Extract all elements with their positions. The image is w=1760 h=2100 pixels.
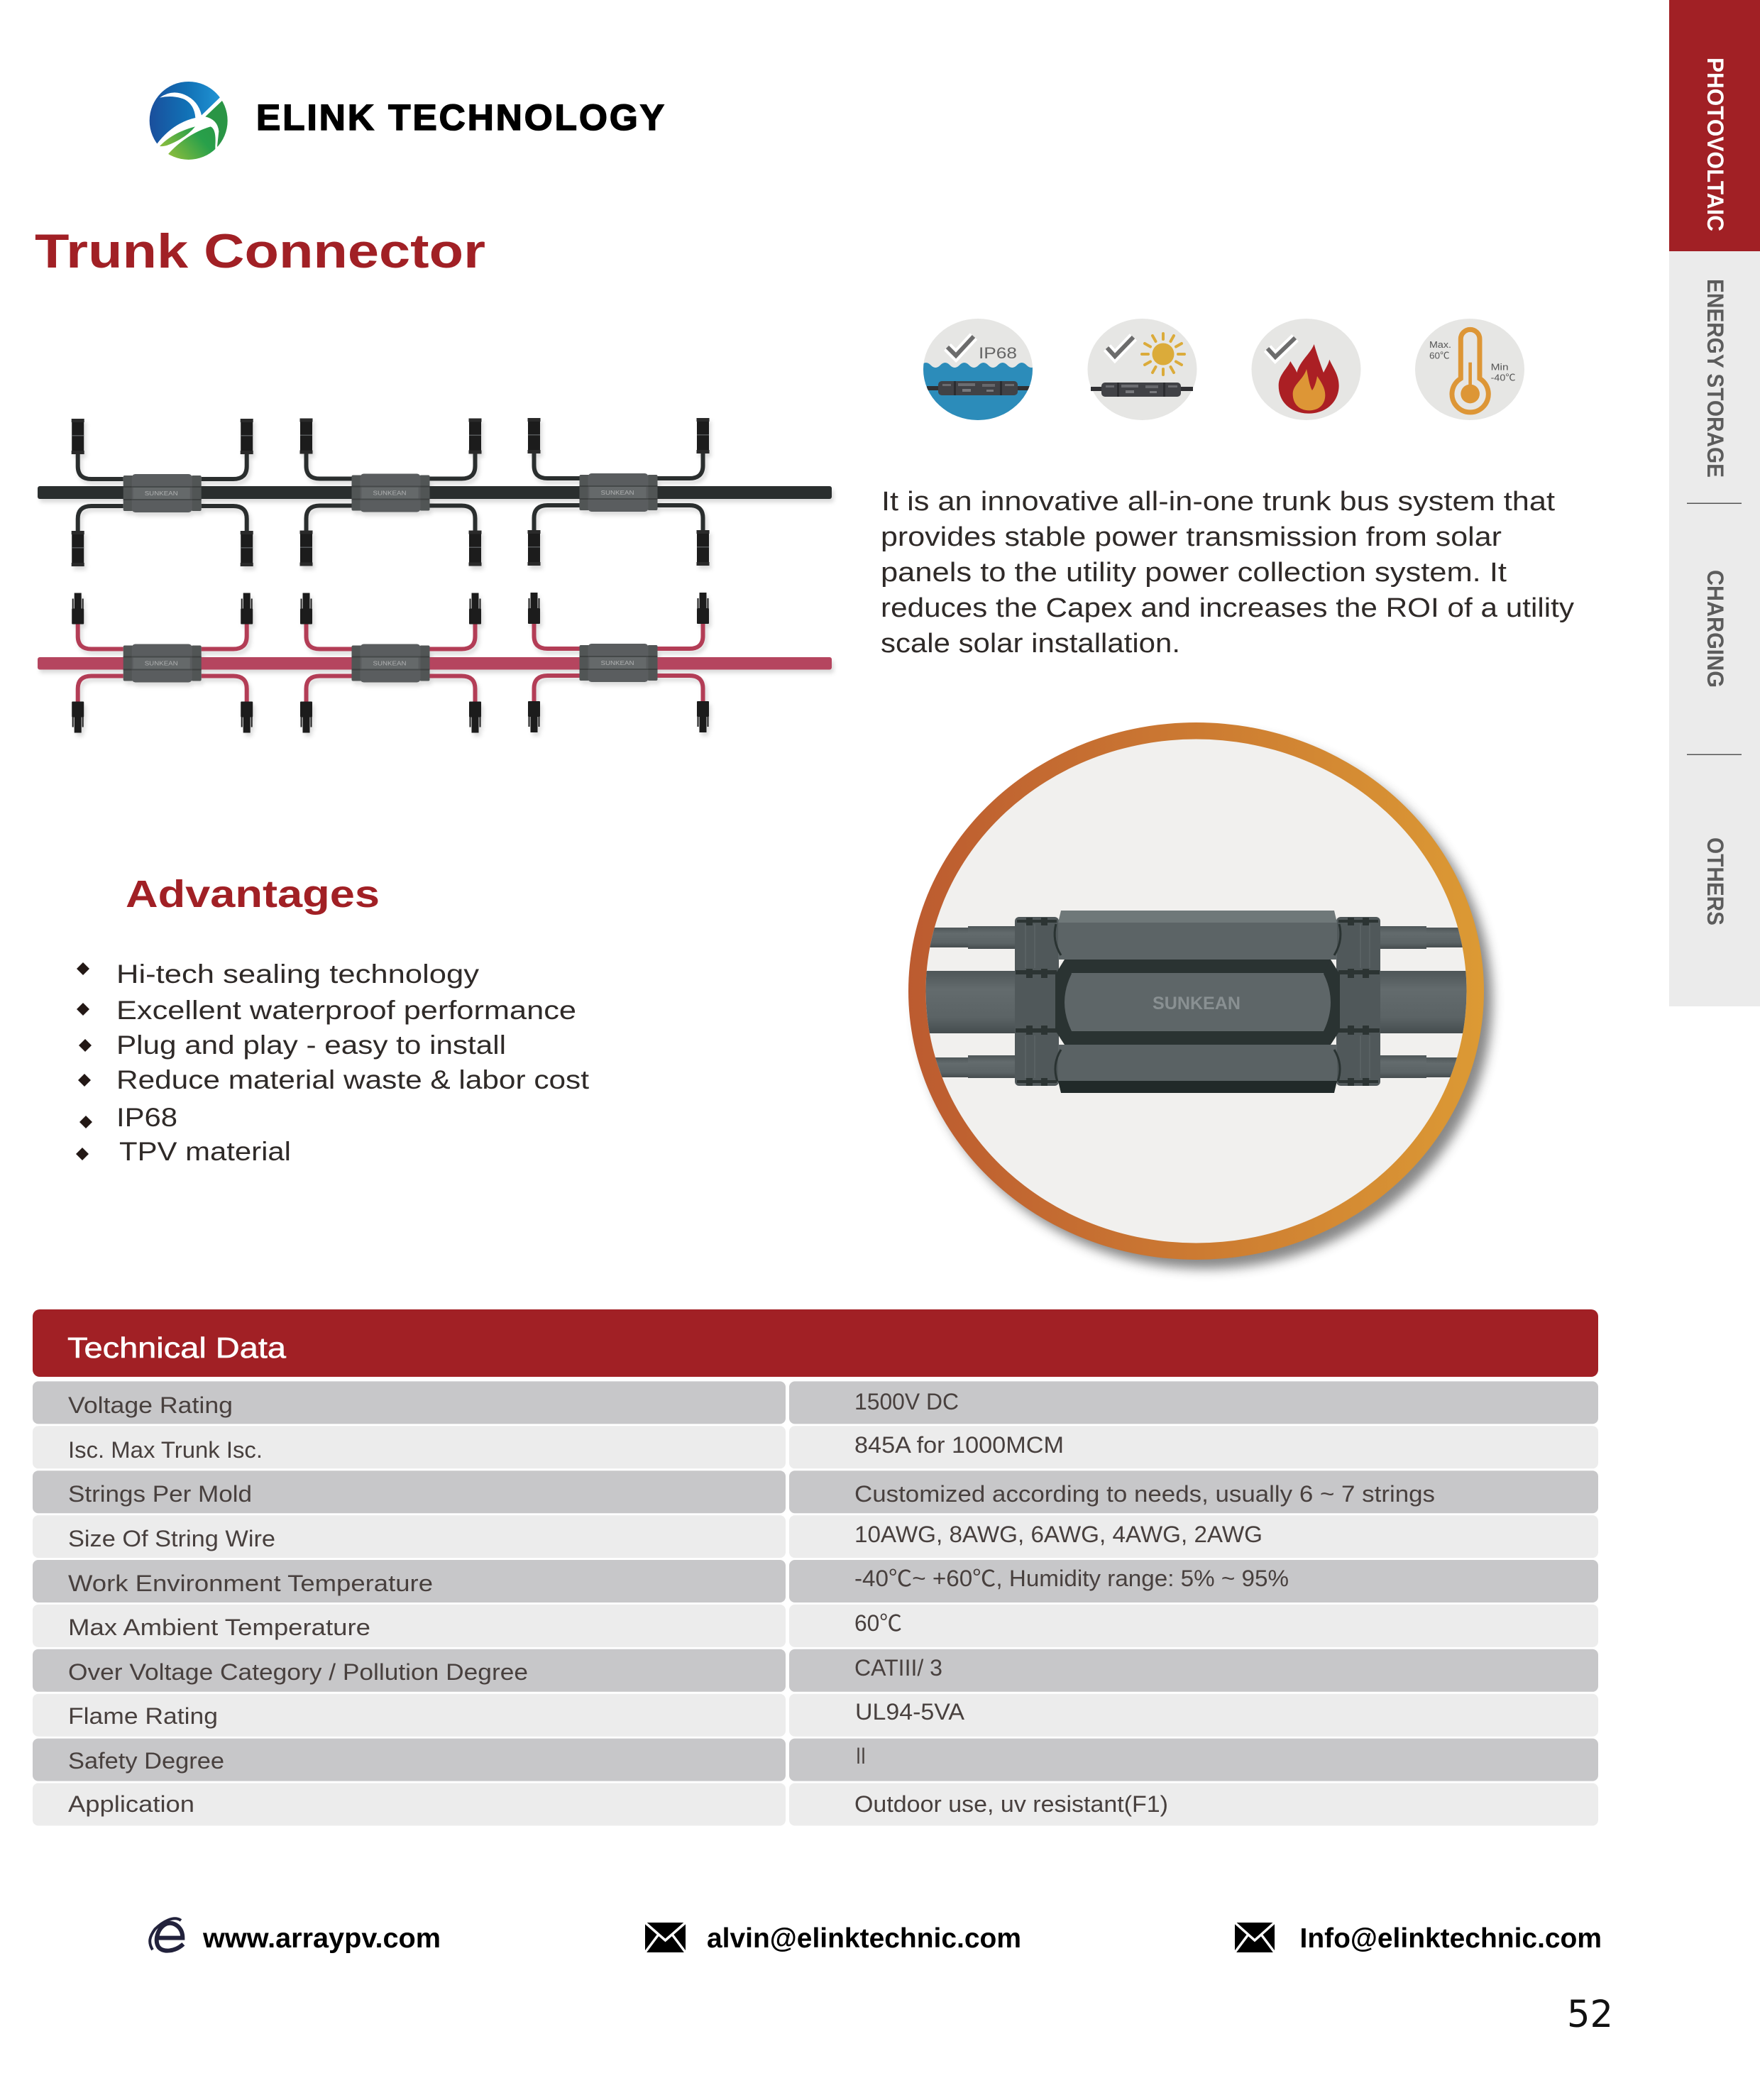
icon: temperature range	[1415, 319, 1524, 420]
connector close-up	[915, 911, 1480, 1093]
list: advantages: IP68	[116, 1103, 177, 1132]
tab: photovoltaic active	[1669, 0, 1760, 251]
table header	[33, 1309, 1598, 1377]
panel: technical data table	[33, 1309, 1598, 1825]
panel: side navigation	[1669, 0, 1760, 1006]
panel: product row black cable	[38, 418, 832, 566]
black connector unit 1: SUNKEAN	[145, 490, 178, 497]
icon: temperature range: -40℃	[1491, 373, 1516, 383]
row: application	[33, 1783, 1598, 1825]
red connector unit 3	[528, 593, 709, 732]
row: over voltage category: CATIII/ 3	[854, 1655, 942, 1681]
row: work environment temperature	[33, 1560, 1598, 1603]
row: safety degree: II	[856, 1743, 866, 1769]
row: flame rating	[33, 1694, 1598, 1737]
footer email info: Info@elinktechnic.com	[1300, 1923, 1602, 1954]
tab: others: OTHERS	[1703, 837, 1728, 925]
icon: temperature range: 60℃	[1429, 351, 1450, 361]
icon: web browser	[150, 1918, 183, 1951]
black connector unit 3	[528, 418, 710, 566]
text block: description: It is an innovative all-in-one trunk bus system that	[881, 487, 1555, 517]
row: safety degree: Safety Degree	[68, 1748, 224, 1774]
list: advantages: Reduce material waste & labor cost	[116, 1065, 590, 1094]
row: strings per mold	[33, 1470, 1598, 1513]
list: advantages	[76, 960, 590, 1166]
row: flame rating: Flame Rating	[68, 1703, 218, 1729]
row: voltage rating	[33, 1381, 1598, 1424]
row: strings per mold: Strings Per Mold	[68, 1481, 252, 1507]
tab: energy storage: ENERGY STORAGE	[1703, 279, 1728, 478]
row: size of string wire	[33, 1515, 1598, 1558]
row: flame rating: UL94-5VA	[855, 1699, 965, 1725]
red connector unit 2	[300, 593, 481, 732]
row: max ambient temperature: Max Ambient Temperature	[68, 1615, 370, 1640]
black connector unit 2: SUNKEAN	[373, 490, 407, 497]
text block: description: provides stable power transmission from solar	[881, 522, 1502, 552]
row: work environment temperature: Work Environment Temperature	[68, 1571, 433, 1596]
list: advantages: TPV material	[119, 1137, 291, 1166]
row: work environment temperature: -40℃~ +60℃, Humidity range: 5% ~ 95%	[854, 1566, 1289, 1591]
connector close-up: SUNKEAN	[1153, 994, 1241, 1013]
row: max ambient temperature: 60℃	[854, 1610, 902, 1636]
text block: description: panels to the utility power collection system. It	[881, 558, 1507, 588]
panel: product row red cable	[38, 593, 832, 732]
tab: charging: CHARGING	[1703, 570, 1728, 688]
red connector unit 2: SUNKEAN	[373, 660, 407, 667]
row: isc	[33, 1426, 1598, 1468]
text block: description: scale solar installation.	[881, 629, 1180, 659]
icon: IP68 waterproof: IP68	[979, 344, 1017, 362]
row: voltage rating: Voltage Rating	[68, 1392, 233, 1418]
row: isc: Isc. Max Trunk Isc.	[68, 1437, 263, 1463]
company name: ELINK TECHNOLOGY	[256, 97, 666, 138]
row: over voltage category	[33, 1649, 1598, 1692]
row: max ambient temperature	[33, 1605, 1598, 1647]
black connector unit 2	[299, 419, 481, 566]
list: advantages: Plug and play - easy to install	[116, 1030, 506, 1060]
page number: 52	[1567, 1993, 1613, 2036]
row: strings per mold: Customized according to needs, usually 6 ~ 7 strings	[854, 1481, 1435, 1507]
row: voltage rating: 1500V DC	[854, 1389, 959, 1414]
black connector unit 1	[72, 419, 253, 566]
black connector unit 3: SUNKEAN	[600, 490, 634, 496]
row: size of string wire: Size Of String Wire	[68, 1526, 275, 1551]
footer email alvin: alvin@elinktechnic.com	[707, 1923, 1021, 1954]
icon: mail 2	[1235, 1923, 1275, 1952]
text block: description: reduces the Capex and increases the ROI of a utility	[881, 593, 1574, 623]
row: application: Application	[68, 1791, 194, 1817]
icon: flame rating	[1252, 319, 1361, 420]
icon: IP68 waterproof	[923, 319, 1033, 420]
row: size of string wire: 10AWG, 8AWG, 6AWG, 4AWG, 2AWG	[854, 1522, 1263, 1547]
table header: Technical Data	[67, 1331, 286, 1364]
panel: connector close-up circle	[908, 722, 1492, 1269]
row: isc: 845A for 1000MCM	[854, 1432, 1064, 1458]
icon: temperature range: Min	[1491, 362, 1509, 373]
red connector unit 1	[72, 593, 253, 732]
list: advantages: Excellent waterproof performance	[116, 996, 576, 1025]
icon: temperature range: Max.	[1429, 339, 1451, 350]
footer website: www.arraypv.com	[202, 1923, 441, 1954]
text block: description	[881, 487, 1574, 659]
red connector unit 1: SUNKEAN	[145, 660, 178, 667]
row: safety degree	[33, 1739, 1598, 1781]
title: Trunk Connector	[35, 224, 485, 278]
row: application: Outdoor use, uv resistant(F1)	[854, 1791, 1168, 1817]
row: over voltage category: Over Voltage Category / Pollution Degree	[68, 1659, 528, 1685]
red connector unit 3: SUNKEAN	[600, 660, 634, 666]
icon: company logo	[149, 82, 228, 160]
list: advantages: Hi-tech sealing technology	[116, 960, 480, 989]
icon: mail 1	[645, 1923, 686, 1952]
heading: advantages: Advantages	[126, 873, 380, 916]
icon: UV sun resistance	[1087, 319, 1197, 420]
tab: photovoltaic active: PHOTOVOLTAIC	[1703, 57, 1728, 231]
